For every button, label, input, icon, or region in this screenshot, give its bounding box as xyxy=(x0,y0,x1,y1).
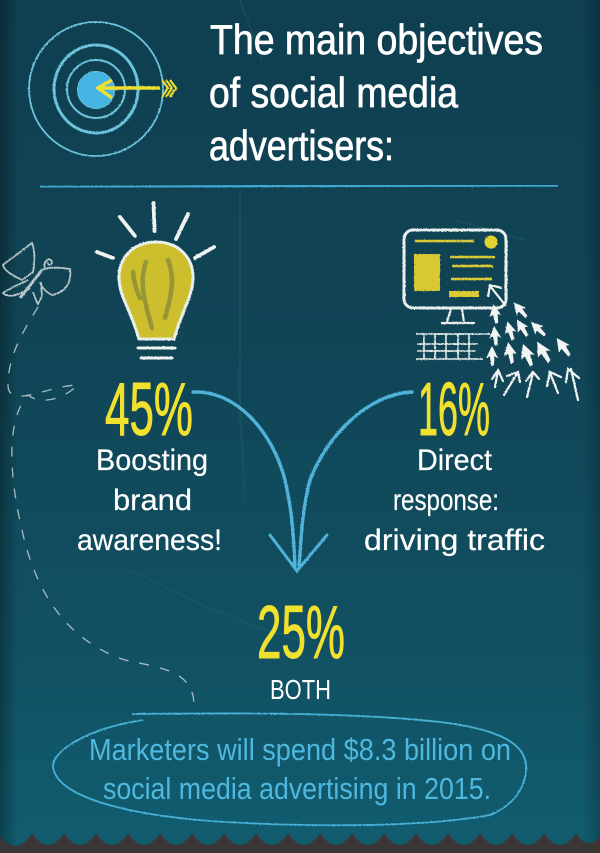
label: boosting brand awareness: awareness! xyxy=(77,524,222,557)
title xyxy=(209,16,543,169)
divider line xyxy=(40,186,558,187)
scalloped bottom edge xyxy=(0,833,600,853)
title: The main objectives xyxy=(210,16,543,63)
label: boosting brand awareness xyxy=(77,444,222,557)
stat: 25%: 25% xyxy=(257,590,345,674)
stat: 45%: 45% xyxy=(105,367,193,451)
text: 16% xyxy=(418,367,490,451)
callout: marketers spend xyxy=(53,713,526,825)
label: boosting brand awareness: Boosting xyxy=(96,444,208,477)
label: boosting brand awareness: brand xyxy=(113,484,192,517)
callout: marketers spend: Marketers will spend $8.3 billion on xyxy=(89,732,511,767)
title: of social media xyxy=(209,69,459,116)
label: both: BOTH xyxy=(270,674,331,705)
label: direct response: driving traffic xyxy=(364,524,545,557)
callout: marketers spend: social media advertising in 2015. xyxy=(103,771,491,806)
icon: butterfly xyxy=(3,243,70,304)
title: advertisers: xyxy=(209,122,394,169)
curved arrows merging xyxy=(193,392,412,571)
label: direct response: Direct xyxy=(417,444,493,477)
label: direct response xyxy=(364,444,545,557)
icon: target with arrow xyxy=(29,22,176,156)
icon: computer with cursor arrows xyxy=(404,230,579,400)
icon: light bulb xyxy=(97,203,214,358)
label: direct response: response: xyxy=(393,484,499,517)
dashed flight path xyxy=(8,307,194,707)
